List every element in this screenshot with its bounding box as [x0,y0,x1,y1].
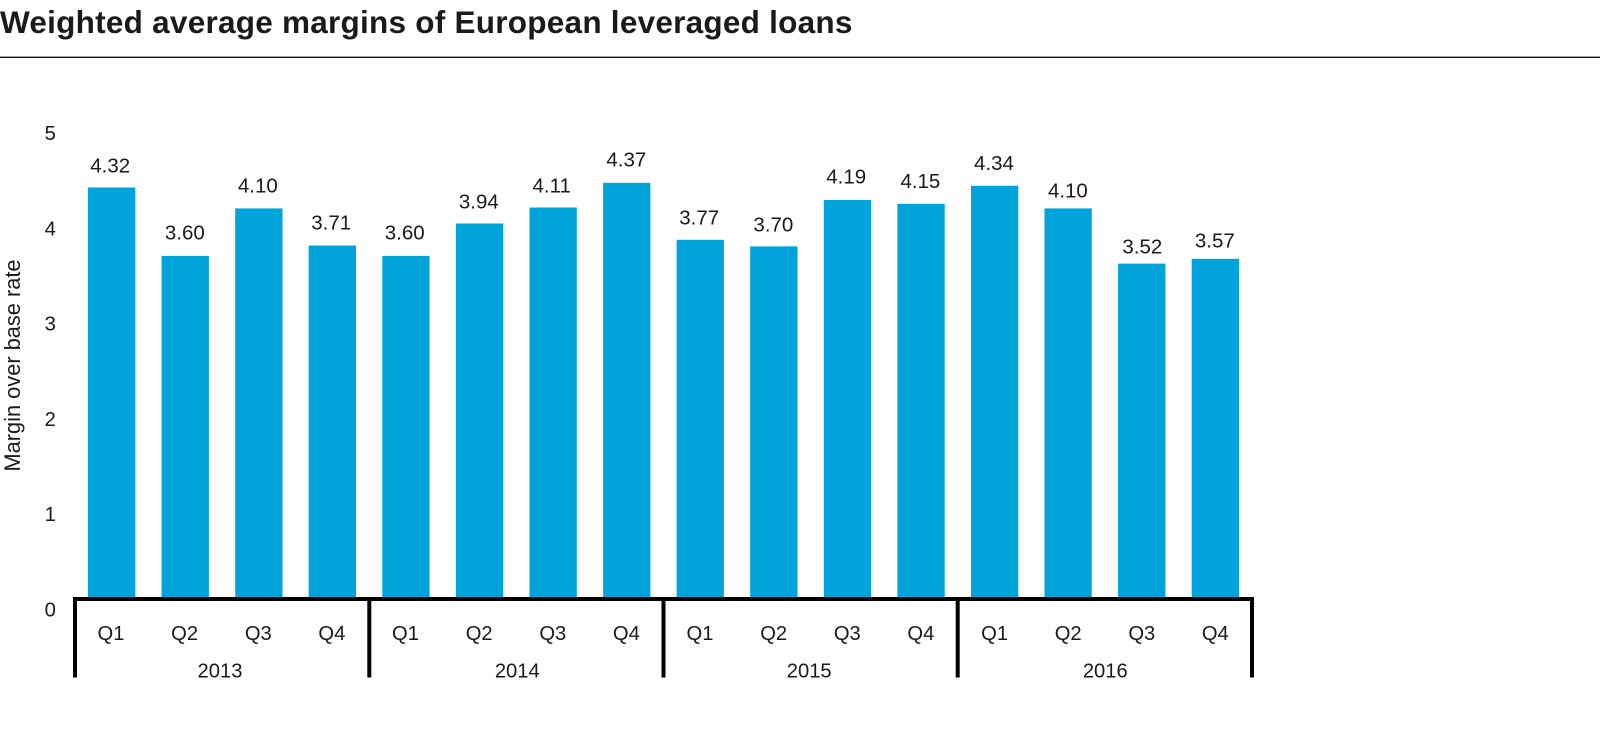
value labels: 3.77 [679,206,719,229]
quarter labels: Q1 [392,623,419,645]
quarter labels: Q4 [1202,623,1229,645]
quarter labels: Q3 [1128,623,1155,645]
y axis ticks: 1 [45,504,56,526]
y axis ticks: 5 [45,123,56,145]
value labels: 4.10 [238,174,278,198]
quarter labels: Q1 [981,623,1008,645]
quarter labels: Q4 [613,623,640,645]
y axis ticks: 2 [45,409,56,431]
quarter labels: Q2 [466,623,493,645]
value labels: 4.15 [900,170,940,193]
value labels: 3.60 [385,221,425,244]
y axis ticks: 3 [45,314,56,336]
value labels: 3.71 [311,212,351,234]
year labels: 2014 [495,660,540,682]
value labels: 4.19 [826,165,866,188]
value labels: 4.37 [606,149,646,172]
quarter labels: Q4 [318,623,345,645]
quarter labels [98,623,1229,645]
year labels: 2013 [198,660,242,682]
quarter labels: Q1 [98,623,124,645]
value labels [90,149,1235,258]
quarter labels: Q3 [245,623,272,645]
quarter labels: Q2 [760,623,787,645]
value labels: 4.34 [974,152,1014,175]
year labels: 2015 [787,660,832,682]
value labels: 4.32 [90,154,130,178]
y axis ticks [45,123,56,622]
quarter labels: Q1 [687,623,713,645]
quarter labels: Q4 [907,623,934,645]
value labels: 3.52 [1122,235,1162,258]
quarter labels: Q2 [1055,623,1082,645]
quarter labels: Q2 [171,623,198,645]
y axis ticks: 4 [45,218,56,240]
value labels: 3.94 [459,190,499,213]
value labels: 3.70 [753,214,793,237]
category axis [73,597,1254,678]
title: Weighted average margins of European leveraged loans [0,4,853,40]
quarter labels: Q3 [834,623,861,645]
value labels: 3.60 [165,221,205,244]
value labels: 3.57 [1195,229,1235,252]
quarter labels: Q3 [539,623,566,645]
value labels: 4.11 [533,174,571,197]
bar chart [88,183,1239,597]
value labels: 4.10 [1048,179,1088,202]
y axis label: Margin over base rate [0,259,25,472]
y axis ticks: 0 [45,600,56,622]
year labels [198,660,1128,682]
year labels: 2016 [1083,660,1128,682]
